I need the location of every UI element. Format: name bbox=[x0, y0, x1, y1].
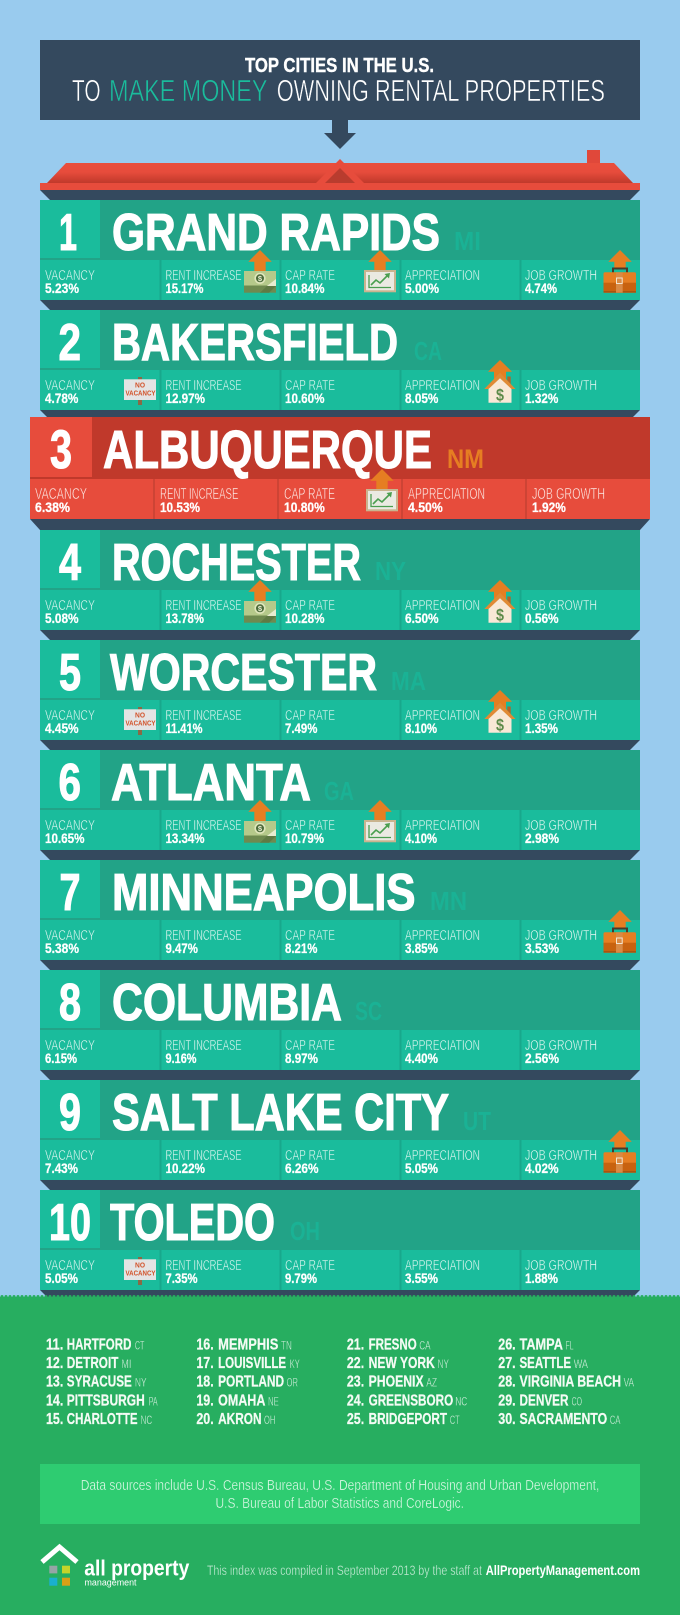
rank number: 1 bbox=[59, 203, 77, 261]
list: cities 16 to 20 bbox=[196, 1336, 300, 1428]
list: cities 26 to 30: 30. bbox=[498, 1411, 516, 1428]
stats strip: VACANCY bbox=[35, 486, 87, 503]
list: cities 16 to 20: 19. bbox=[196, 1392, 214, 1409]
stats strip: RENT INCREASE bbox=[166, 927, 242, 944]
list: cities 26 to 30: 28. bbox=[498, 1374, 516, 1391]
stats strip: RENT INCREASE bbox=[166, 1037, 242, 1054]
list: cities 11 to 15: 15. bbox=[46, 1411, 63, 1428]
city name: MINNEAPOLIS bbox=[112, 863, 416, 921]
stats strip: 5.08% bbox=[45, 611, 79, 626]
stats strip: JOB GROWTH bbox=[525, 707, 597, 724]
list: cities 11 to 15: MI bbox=[121, 1357, 131, 1371]
list: cities 11 to 15: 12. bbox=[46, 1355, 63, 1372]
list: cities 11 to 15: SYRACUSE bbox=[67, 1374, 132, 1391]
logo: all property management: management bbox=[84, 1578, 137, 1589]
city name: ROCHESTER bbox=[112, 533, 361, 591]
list: cities 21 to 25: 25. bbox=[347, 1411, 364, 1428]
list: cities 21 to 25: CA bbox=[419, 1338, 431, 1352]
state: MI bbox=[454, 226, 481, 256]
state: CA bbox=[414, 336, 442, 366]
list: cities 26 to 30: FL bbox=[566, 1338, 574, 1352]
stats strip bbox=[40, 370, 640, 410]
state: SC bbox=[355, 996, 382, 1026]
list: cities 26 to 30: VIRGINIA BEACH bbox=[520, 1374, 621, 1391]
stats strip: VACANCY bbox=[45, 707, 95, 724]
list: cities 21 to 25: GREENSBORO bbox=[369, 1392, 453, 1409]
icon: house with up arrow: $ bbox=[496, 386, 504, 404]
stats strip: 5.05% bbox=[405, 1161, 438, 1176]
title line two: MAKE MONEY bbox=[109, 74, 268, 108]
stats strip: 8.05% bbox=[405, 391, 438, 406]
list: cities 11 to 15: NY bbox=[135, 1376, 147, 1390]
rank number: 9 bbox=[59, 1083, 81, 1141]
rank number: 3 bbox=[50, 421, 72, 480]
list: cities 21 to 25: 23. bbox=[347, 1374, 364, 1391]
icon: cash with up arrow bbox=[244, 580, 276, 623]
stats strip: 15.17% bbox=[166, 281, 204, 296]
list: cities 16 to 20: LOUISVILLE bbox=[218, 1355, 286, 1372]
stats strip: JOB GROWTH bbox=[525, 377, 597, 394]
list: cities 11 to 15 bbox=[46, 1336, 158, 1428]
state: GA bbox=[324, 776, 354, 806]
icon: no vacancy sign: NO bbox=[135, 1262, 146, 1269]
stats strip bbox=[40, 590, 640, 630]
stats strip bbox=[40, 810, 640, 850]
stats strip: VACANCY bbox=[45, 1037, 95, 1054]
stats strip: APPRECIATION bbox=[405, 267, 480, 284]
logo: all property management bbox=[42, 1547, 190, 1589]
stats strip: 8.21% bbox=[285, 941, 317, 956]
stats strip: RENT INCREASE bbox=[166, 707, 242, 724]
list: cities 11 to 15: NC bbox=[140, 1413, 152, 1427]
state: OH bbox=[290, 1216, 320, 1246]
icon: house with up arrow: $ bbox=[496, 716, 504, 734]
rank number: 8 bbox=[59, 973, 81, 1031]
list: cities 26 to 30: CA bbox=[610, 1413, 620, 1427]
stats strip: CAP RATE bbox=[285, 377, 335, 394]
stats strip: 7.43% bbox=[45, 1161, 78, 1176]
list: cities 16 to 20: 17. bbox=[196, 1355, 214, 1372]
stats strip: 5.23% bbox=[45, 281, 79, 296]
stats strip: JOB GROWTH bbox=[525, 597, 597, 614]
row 10: Toledo bbox=[40, 1190, 640, 1297]
list: cities 21 to 25: PHOENIX bbox=[369, 1374, 424, 1391]
icon: no vacancy sign: NO bbox=[135, 382, 146, 389]
stats strip: VACANCY bbox=[45, 1257, 95, 1274]
stats strip: JOB GROWTH bbox=[532, 486, 605, 503]
stats strip bbox=[40, 700, 640, 740]
stats strip: CAP RATE bbox=[285, 267, 335, 284]
list: cities 21 to 25: NEW YORK bbox=[369, 1355, 435, 1372]
stats strip: 4.50% bbox=[408, 500, 443, 515]
stats strip: RENT INCREASE bbox=[160, 486, 238, 503]
list: cities 16 to 20: 16. bbox=[196, 1336, 214, 1353]
list: cities 16 to 20: OH bbox=[264, 1413, 275, 1427]
row 6: Atlanta bbox=[40, 750, 640, 860]
green ground bbox=[0, 1294, 680, 1615]
stats strip: JOB GROWTH bbox=[525, 927, 597, 944]
stats strip: 3.53% bbox=[525, 941, 559, 956]
stats strip: RENT INCREASE bbox=[166, 1147, 242, 1164]
city name: SALT LAKE CITY bbox=[112, 1083, 449, 1141]
icon: no vacancy sign bbox=[124, 377, 156, 405]
stats strip: 10.84% bbox=[285, 281, 324, 296]
list: cities 16 to 20: PORTLAND bbox=[218, 1374, 284, 1391]
stats strip: 10.65% bbox=[45, 831, 84, 846]
icon: no vacancy sign: NO bbox=[135, 712, 146, 719]
stats strip: 2.98% bbox=[525, 831, 559, 846]
stats strip: RENT INCREASE bbox=[166, 817, 242, 834]
stats strip: 4.40% bbox=[405, 1051, 438, 1066]
city name: WORCESTER bbox=[110, 643, 377, 701]
stats strip bbox=[30, 479, 650, 519]
stats strip: CAP RATE bbox=[285, 1147, 335, 1164]
stats strip: CAP RATE bbox=[285, 597, 335, 614]
icon: no vacancy sign: VACANCY bbox=[126, 718, 156, 727]
list: cities 26 to 30 bbox=[498, 1336, 634, 1428]
list: cities 26 to 30: SACRAMENTO bbox=[520, 1411, 607, 1428]
list: cities 11 to 15: PA bbox=[149, 1394, 158, 1408]
city name: BAKERSFIELD bbox=[112, 313, 398, 371]
stats strip: 7.49% bbox=[285, 721, 317, 736]
icon: house with up arrow bbox=[484, 690, 516, 734]
title line two bbox=[72, 74, 605, 108]
stats strip: 1.32% bbox=[525, 391, 558, 406]
stats strip bbox=[40, 260, 640, 300]
stats strip: 10.60% bbox=[285, 391, 324, 406]
stats strip: RENT INCREASE bbox=[166, 597, 242, 614]
icon: cash with up arrow bbox=[244, 250, 276, 293]
stats strip: JOB GROWTH bbox=[525, 1147, 597, 1164]
list: cities 16 to 20: TN bbox=[281, 1338, 292, 1352]
list: cities 11 to 15: CT bbox=[135, 1338, 145, 1352]
stats strip: JOB GROWTH bbox=[525, 1037, 597, 1054]
stats strip: CAP RATE bbox=[285, 1037, 335, 1054]
stats strip: 1.88% bbox=[525, 1271, 558, 1286]
stats strip: 0.56% bbox=[525, 611, 559, 626]
row 8: Columbia bbox=[40, 970, 640, 1080]
stats strip: CAP RATE bbox=[285, 1257, 335, 1274]
stats strip: 6.50% bbox=[405, 611, 439, 626]
list: cities 16 to 20: MEMPHIS bbox=[218, 1336, 279, 1353]
list: cities 16 to 20: OR bbox=[287, 1376, 298, 1390]
stats strip: 10.28% bbox=[285, 611, 324, 626]
list: cities 11 to 15: 14. bbox=[46, 1392, 63, 1409]
stats strip: 10.53% bbox=[160, 500, 200, 515]
stats strip: 2.56% bbox=[525, 1051, 559, 1066]
state: NM bbox=[447, 444, 484, 474]
stats strip: VACANCY bbox=[45, 817, 95, 834]
city name: GRAND RAPIDS bbox=[112, 203, 440, 261]
list: cities 26 to 30: WA bbox=[574, 1357, 588, 1371]
city name: ATLANTA bbox=[111, 753, 311, 811]
list: cities 26 to 30: CO bbox=[572, 1394, 582, 1408]
stats strip: 5.38% bbox=[45, 941, 79, 956]
list: cities 16 to 20: NE bbox=[268, 1394, 279, 1408]
icon: house with up arrow bbox=[484, 580, 516, 624]
stats strip: VACANCY bbox=[45, 1147, 95, 1164]
row 2: Bakersfield bbox=[40, 310, 640, 417]
icon: briefcase with up arrow bbox=[604, 910, 636, 953]
rank number: 10 bbox=[49, 1193, 91, 1251]
stats strip: 8.97% bbox=[285, 1051, 318, 1066]
list: cities 21 to 25: NC bbox=[455, 1394, 468, 1408]
stats strip: 7.35% bbox=[166, 1271, 198, 1286]
stats strip: APPRECIATION bbox=[408, 486, 485, 503]
stats strip: 4.74% bbox=[525, 281, 557, 296]
stats strip: 13.34% bbox=[166, 831, 204, 846]
stats strip: 4.78% bbox=[45, 391, 78, 406]
stats strip: 6.26% bbox=[285, 1161, 318, 1176]
stats strip: 9.47% bbox=[166, 941, 198, 956]
data sources panel bbox=[40, 1464, 640, 1524]
icon: house with up arrow bbox=[484, 360, 516, 404]
row 4: Rochester bbox=[40, 530, 640, 640]
row 3: Albuquerque (highlighted) bbox=[30, 417, 650, 530]
stats strip bbox=[40, 1030, 640, 1070]
list: cities 26 to 30: TAMPA bbox=[520, 1336, 563, 1353]
list: cities 21 to 25: 22. bbox=[347, 1355, 364, 1372]
roof bbox=[40, 150, 640, 200]
list: cities 21 to 25: 24. bbox=[347, 1392, 364, 1409]
row 5: Worcester bbox=[40, 640, 640, 750]
stats strip: 6.38% bbox=[35, 500, 70, 515]
stats strip: VACANCY bbox=[45, 597, 95, 614]
stats strip: APPRECIATION bbox=[405, 377, 480, 394]
row 9: Salt Lake City bbox=[40, 1080, 640, 1190]
list: cities 16 to 20: 18. bbox=[196, 1374, 214, 1391]
stats strip: 13.78% bbox=[166, 611, 204, 626]
stats strip: 5.05% bbox=[45, 1271, 78, 1286]
state: UT bbox=[463, 1106, 491, 1136]
list: cities 26 to 30: DENVER bbox=[520, 1392, 569, 1409]
state: MN bbox=[430, 886, 467, 916]
stats strip: 4.02% bbox=[525, 1161, 559, 1176]
arrow: banner to house bbox=[324, 120, 356, 149]
stats strip: APPRECIATION bbox=[405, 1037, 480, 1054]
stats strip: 4.10% bbox=[405, 831, 437, 846]
stats strip: APPRECIATION bbox=[405, 817, 480, 834]
data sources panel: U.S. Bureau of Labor Statistics and CoreLogic. bbox=[216, 1495, 464, 1512]
footer credit: AllPropertyManagement.com bbox=[486, 1562, 640, 1578]
stats strip: CAP RATE bbox=[285, 927, 335, 944]
list: cities 21 to 25: 21. bbox=[347, 1336, 364, 1353]
icon: no vacancy sign: VACANCY bbox=[126, 1268, 156, 1277]
stats strip: 5.00% bbox=[405, 281, 439, 296]
icon: chart with up arrow bbox=[364, 250, 396, 292]
list: cities 26 to 30: 29. bbox=[498, 1392, 516, 1409]
icon: cash with up arrow bbox=[244, 800, 276, 843]
stats strip: 3.85% bbox=[405, 941, 438, 956]
list: cities 21 to 25: BRIDGEPORT bbox=[369, 1411, 447, 1428]
stats strip: CAP RATE bbox=[285, 707, 335, 724]
stats strip: CAP RATE bbox=[284, 486, 335, 503]
logo: all property management: all property bbox=[84, 1556, 190, 1581]
list: cities 21 to 25: AZ bbox=[426, 1376, 437, 1390]
stats strip: VACANCY bbox=[45, 267, 95, 284]
rank number: 6 bbox=[58, 753, 81, 811]
stats strip bbox=[40, 1250, 640, 1290]
list: cities 16 to 20: OMAHA bbox=[218, 1392, 266, 1409]
stats strip: 9.16% bbox=[166, 1051, 196, 1066]
icon: briefcase with up arrow bbox=[604, 250, 636, 293]
icon: no vacancy sign: VACANCY bbox=[126, 388, 156, 397]
stats strip: 4.45% bbox=[45, 721, 79, 736]
stats strip: 1.92% bbox=[532, 500, 566, 515]
list: cities 21 to 25: NY bbox=[438, 1357, 449, 1371]
stats strip: 3.55% bbox=[405, 1271, 438, 1286]
title line one: TOP CITIES IN THE U.S. bbox=[245, 54, 434, 77]
stats strip: APPRECIATION bbox=[405, 597, 480, 614]
stats strip: VACANCY bbox=[45, 377, 95, 394]
title line two: TO bbox=[72, 74, 101, 108]
stats strip: 12.97% bbox=[166, 391, 205, 406]
stats strip: 6.15% bbox=[45, 1051, 77, 1066]
icon: house with up arrow: $ bbox=[496, 606, 504, 624]
list: cities 11 to 15: PITTSBURGH bbox=[67, 1392, 145, 1409]
footer credit: This index was compiled in September 2013 by the staff at bbox=[207, 1562, 482, 1578]
icon: chart with up arrow bbox=[364, 800, 396, 842]
stats strip: 11.41% bbox=[166, 721, 202, 736]
list: cities 26 to 30: 26. bbox=[498, 1336, 516, 1353]
stats strip: RENT INCREASE bbox=[166, 1257, 242, 1274]
list: cities 21 to 25 bbox=[347, 1336, 468, 1428]
stats strip: RENT INCREASE bbox=[166, 377, 242, 394]
stats strip bbox=[40, 1140, 640, 1180]
state: NY bbox=[375, 556, 406, 586]
stats strip: APPRECIATION bbox=[405, 707, 480, 724]
list: cities 11 to 15: 11. bbox=[46, 1336, 63, 1353]
row 1: Grand Rapids bbox=[40, 200, 640, 310]
list: cities 21 to 25: FRESNO bbox=[369, 1336, 417, 1353]
stats strip: CAP RATE bbox=[285, 817, 335, 834]
list: cities 16 to 20: 20. bbox=[196, 1411, 214, 1428]
rank number: 7 bbox=[60, 863, 80, 921]
icon: no vacancy sign bbox=[124, 1257, 156, 1285]
stats strip: JOB GROWTH bbox=[525, 817, 597, 834]
stats strip: JOB GROWTH bbox=[525, 267, 597, 284]
list: cities 11 to 15: CHARLOTTE bbox=[67, 1411, 138, 1428]
list: cities 21 to 25: CT bbox=[450, 1413, 460, 1427]
list: cities 11 to 15: 13. bbox=[46, 1374, 63, 1391]
stats strip: 10.80% bbox=[284, 500, 325, 515]
list: cities 11 to 15: DETROIT bbox=[67, 1355, 119, 1372]
rank number: 5 bbox=[59, 643, 81, 701]
icon: cash with up arrow: $ bbox=[258, 824, 263, 833]
stats strip: 1.35% bbox=[525, 721, 558, 736]
stats strip: VACANCY bbox=[45, 927, 95, 944]
list: cities 16 to 20: AKRON bbox=[218, 1411, 262, 1428]
icon: cash with up arrow: $ bbox=[258, 274, 263, 283]
rank number: 4 bbox=[59, 533, 81, 591]
stats strip bbox=[40, 920, 640, 960]
stats strip: 9.79% bbox=[285, 1271, 317, 1286]
stats strip: APPRECIATION bbox=[405, 927, 480, 944]
city name: COLUMBIA bbox=[112, 973, 342, 1031]
row 7: Minneapolis bbox=[40, 860, 640, 970]
stats strip: 10.22% bbox=[166, 1161, 205, 1176]
list: cities 26 to 30: SEATTLE bbox=[520, 1355, 571, 1372]
rank number: 2 bbox=[58, 313, 81, 371]
icon: cash with up arrow: $ bbox=[258, 604, 263, 613]
stats strip: RENT INCREASE bbox=[166, 267, 242, 284]
list: cities 11 to 15: HARTFORD bbox=[67, 1336, 131, 1353]
stats strip: 8.10% bbox=[405, 721, 437, 736]
icon: chart with up arrow bbox=[366, 469, 398, 511]
stats strip: APPRECIATION bbox=[405, 1147, 480, 1164]
city name: TOLEDO bbox=[110, 1193, 275, 1251]
stats strip: APPRECIATION bbox=[405, 1257, 480, 1274]
list: cities 26 to 30: 27. bbox=[498, 1355, 516, 1372]
title banner bbox=[40, 40, 640, 120]
icon: no vacancy sign bbox=[124, 707, 156, 735]
list: cities 26 to 30: VA bbox=[624, 1376, 634, 1390]
stats strip: 10.79% bbox=[285, 831, 324, 846]
list: cities 16 to 20: KY bbox=[290, 1357, 300, 1371]
stats strip: JOB GROWTH bbox=[525, 1257, 597, 1274]
city name: ALBUQUERQUE bbox=[103, 421, 432, 480]
icon: briefcase with up arrow bbox=[604, 1130, 636, 1173]
state: MA bbox=[391, 666, 426, 696]
